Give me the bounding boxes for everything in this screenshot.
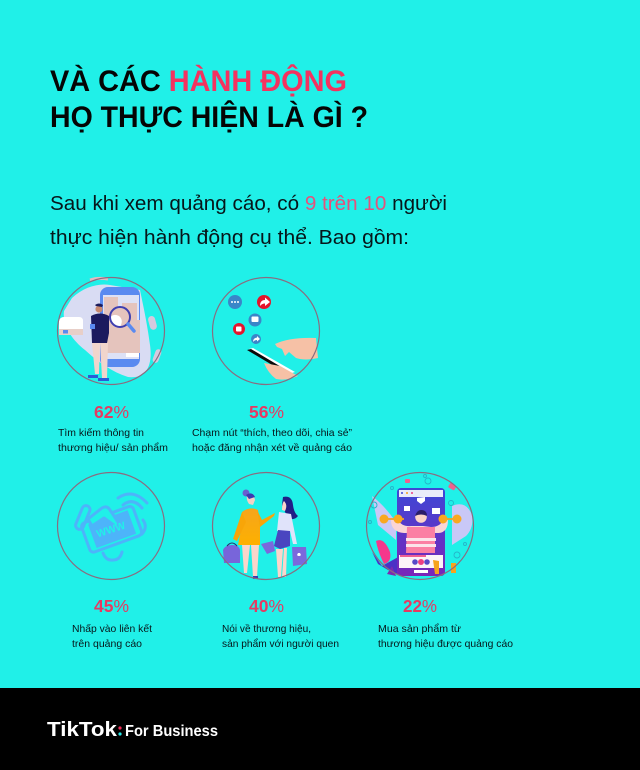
stat: 45%: 45% [94,596,129,616]
title: HỌ THỰC HIỆN LÀ GÌ ? [50,100,368,134]
stat: 40% [222,596,339,650]
circle outlines [58,278,474,580]
figure: person [88,304,109,381]
icon: tap www link [74,494,147,560]
intro text: thực hiện hành động cụ thể. Bao gồm: [50,227,409,249]
stat: 62%: 62% [94,402,129,422]
TikTok For Business logo: TikTok [47,718,118,741]
icon: person searching on phone [59,278,162,381]
stat: 56% [192,402,353,454]
title [50,64,368,134]
stat: 22% [378,596,513,650]
TikTok For Business logo [47,718,218,741]
title: VÀ CÁC HÀNH ĐỘNG [50,64,347,98]
stat: 40%: 40% [249,596,284,616]
icon: man lifting dumbbell over phone [368,474,472,576]
icon: tap www link: WWW [95,520,127,540]
stat: 22%: Mua sản phẩm từ [378,623,461,635]
footer band [0,688,640,770]
intro text [50,193,447,249]
stat: 56%: Chạm nút “thích, theo dõi, chia sẻ” [192,427,353,439]
stat: 40%: sản phẩm với người quen [222,638,339,650]
stat: 56%: 56% [249,402,284,422]
icon: social reactions and phone [228,295,318,380]
stat: 45%: trên quảng cáo [72,638,142,650]
stat: 62%: Tìm kiếm thông tin [58,427,144,439]
stat: 45% [72,596,152,650]
icon: two women shopping [223,490,307,579]
intro text: Sau khi xem quảng cáo, có 9 trên 10 người [50,193,447,215]
stat: 56%: hoặc đăng nhận xét về quảng cáo [192,442,352,454]
stat: 62%: thương hiệu/ sản phẩm [58,442,168,454]
stat: 45%: Nhấp vào liên kết [72,623,152,635]
stat: 40%: Nói về thương hiệu, [222,623,311,635]
TikTok For Business logo: For Business [125,723,218,740]
stat: 22%: 22% [403,596,437,616]
stat: 22%: thương hiệu được quảng cáo [378,638,513,650]
stat: 62% [58,402,168,454]
